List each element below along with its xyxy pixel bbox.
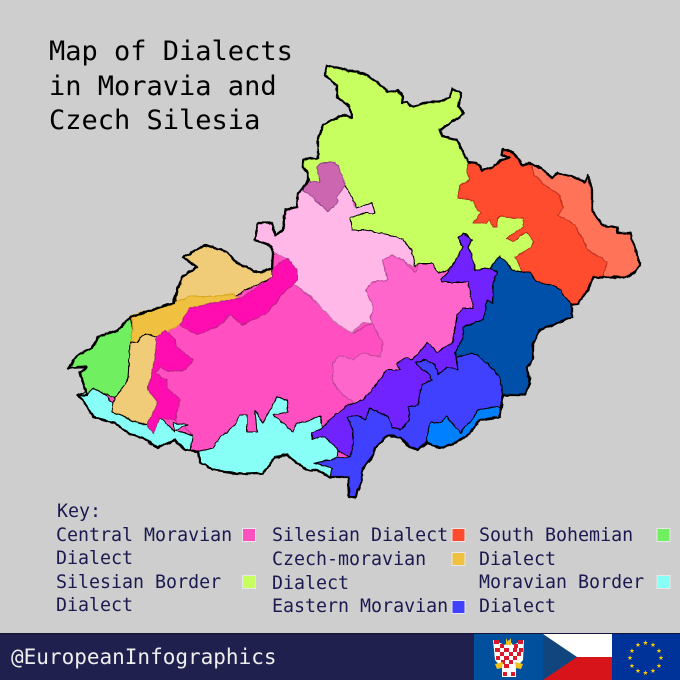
region: South Bohemian bbox=[68, 317, 133, 398]
title: in Moravia and bbox=[49, 71, 277, 102]
title: Map of Dialects bbox=[49, 36, 293, 67]
region: Czech-Moravian north pale bbox=[175, 245, 272, 303]
flag: European Union: ★ bbox=[635, 666, 641, 676]
flag: European Union: ★ bbox=[650, 640, 656, 650]
flag: European Union: ★ bbox=[635, 640, 641, 650]
title bbox=[49, 36, 293, 136]
legend entry: Central Moravian Dialect: Central Moravian bbox=[56, 525, 232, 546]
region: Moravian Border west bbox=[78, 388, 193, 450]
title: Czech Silesia bbox=[49, 105, 260, 136]
legend entry: South Bohemian Dialect: South Bohemian bbox=[479, 525, 633, 546]
region: Eastern Moravian purple bbox=[312, 233, 497, 457]
flag: European Union: ★ bbox=[656, 661, 662, 671]
region: Central Moravian east light bbox=[333, 255, 473, 403]
icon: Moravian checkered eagle bbox=[493, 638, 524, 677]
region: Eastern Moravian bright blue bbox=[427, 407, 500, 448]
flag: Moravia bbox=[474, 634, 543, 680]
region: mauve transition bbox=[302, 162, 345, 211]
map outer outline bbox=[68, 65, 640, 498]
legend entry: Central Moravian Dialect: Dialect bbox=[56, 548, 133, 569]
legend entry: Czech-moravian Dialect: Dialect bbox=[272, 573, 349, 594]
legend heading: Key: bbox=[57, 501, 101, 522]
legend entry: Moravian Border Dialect bbox=[479, 572, 670, 617]
legend entry: South Bohemian Dialect: Dialect bbox=[479, 549, 556, 570]
flag: European Union: ★ bbox=[643, 638, 649, 648]
region: Czech-Moravian south pale bbox=[112, 333, 158, 425]
footer handle: @EuropeanInfographics bbox=[11, 645, 277, 669]
region: Silesian east light bbox=[530, 163, 640, 277]
flag: European Union: ★ bbox=[656, 646, 662, 656]
legend entry: Czech-moravian Dialect bbox=[272, 549, 465, 594]
legend entry: South Bohemian Dialect bbox=[479, 525, 670, 570]
footer bar bbox=[0, 633, 680, 680]
legend entry: Moravian Border Dialect: Dialect bbox=[479, 596, 556, 617]
legend entry: Eastern Moravian: Eastern Moravian bbox=[272, 596, 448, 617]
region: Czech-Moravian middle bbox=[130, 294, 240, 343]
legend entry: Central Moravian Dialect bbox=[56, 525, 256, 569]
flag: European Union: ★ bbox=[627, 653, 633, 663]
flag: European Union: ★ bbox=[658, 653, 664, 663]
legend entry: Czech-moravian Dialect: Czech-moravian bbox=[272, 549, 426, 570]
map of dialect regions bbox=[68, 65, 640, 498]
legend entry: Silesian Dialect: Silesian Dialect bbox=[272, 525, 448, 546]
region: Central Moravian north pale bbox=[255, 185, 415, 333]
region: Central Moravian magenta west bbox=[147, 330, 193, 433]
map base fill bbox=[68, 65, 640, 498]
flag: European Union: ★ bbox=[650, 666, 656, 676]
region: Moravian Border east bbox=[198, 397, 338, 477]
region: Central Moravian base bbox=[155, 283, 453, 452]
legend entry: Silesian Border Dialect: Dialect bbox=[56, 595, 133, 616]
flag: European Union: ★ bbox=[629, 646, 635, 656]
region: Central Moravian magenta north bbox=[180, 258, 297, 335]
flag: European Union: ★ bbox=[629, 661, 635, 671]
legend entry: Silesian Border Dialect: Silesian Border bbox=[56, 572, 221, 593]
legend bbox=[56, 501, 670, 617]
legend entry: Silesian Border Dialect bbox=[56, 572, 256, 616]
legend entry: Moravian Border Dialect: Moravian Border bbox=[479, 572, 644, 593]
region: Silesian main bbox=[458, 149, 607, 305]
region: Eastern Moravian dark blue bbox=[455, 256, 572, 395]
flag: European Union: ★ bbox=[643, 668, 649, 678]
flag: Czech Republic bbox=[543, 634, 612, 680]
flag: European Union bbox=[612, 634, 680, 680]
region: Silesian Border bbox=[303, 65, 534, 273]
region: Eastern Moravian blue bbox=[315, 352, 503, 498]
